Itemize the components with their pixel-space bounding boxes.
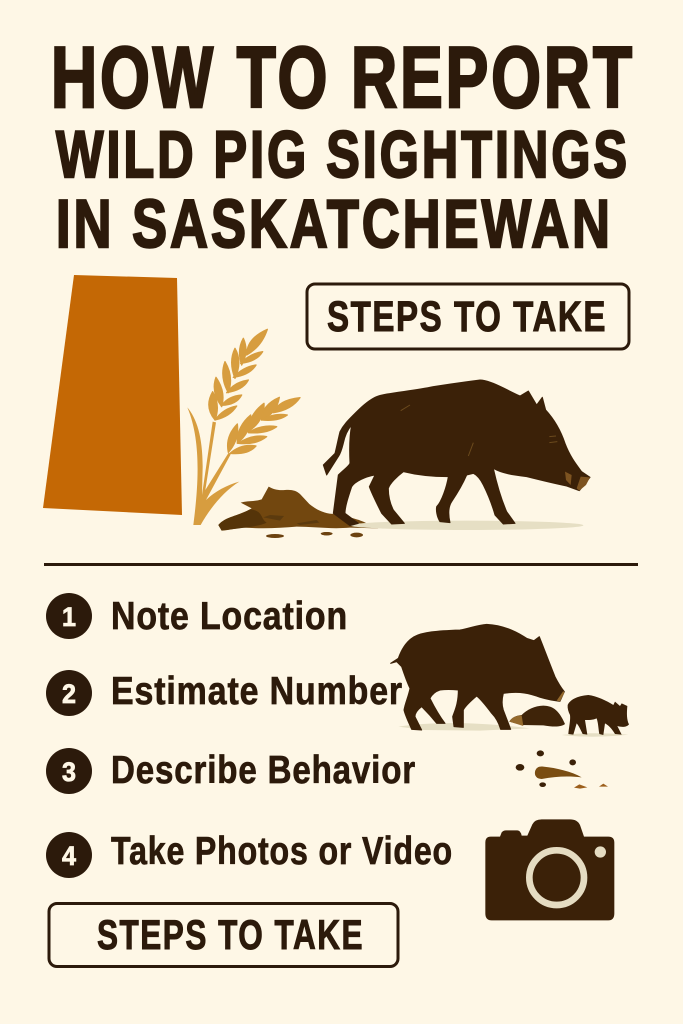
icon: dirt mound [218, 487, 378, 538]
piglet lying [509, 706, 565, 726]
icon: wheat [187, 329, 300, 525]
step 4: Take Photos or Video [111, 830, 453, 873]
icon: wild boar adult [323, 380, 590, 530]
step 2: Estimate Number [111, 670, 403, 713]
step 1: Note Location [111, 595, 348, 638]
blade and stalks [187, 407, 239, 525]
step 1 [46, 593, 348, 639]
divider [44, 563, 638, 566]
ground shadow [350, 521, 583, 530]
step 3 [46, 748, 416, 794]
step 1: 1 [62, 602, 76, 632]
icon: camera [485, 819, 614, 920]
step 3: 3 [62, 757, 76, 787]
step 2: 2 [62, 679, 76, 709]
button: steps to take (top) [307, 284, 629, 349]
button: steps to take (top): STEPS TO TAKE [327, 293, 607, 341]
step 4: 4 [62, 841, 76, 871]
map: Saskatchewan [43, 275, 182, 515]
shadows [398, 723, 628, 737]
lower ear [228, 397, 300, 452]
piglet standing [568, 695, 629, 735]
step 4 [46, 830, 453, 878]
icon: dirt crumbs [321, 532, 363, 537]
icon: boar with piglets [391, 624, 629, 737]
title [51, 30, 635, 262]
boar silhouette [323, 380, 590, 526]
icon: droppings [516, 750, 608, 789]
step 3: Describe Behavior [111, 749, 416, 792]
adult boar [391, 624, 564, 730]
button: steps to take (bottom): STEPS TO TAKE [97, 911, 364, 958]
upper ear [209, 329, 267, 420]
button: steps to take (bottom) [49, 904, 398, 966]
step 2 [46, 670, 403, 716]
